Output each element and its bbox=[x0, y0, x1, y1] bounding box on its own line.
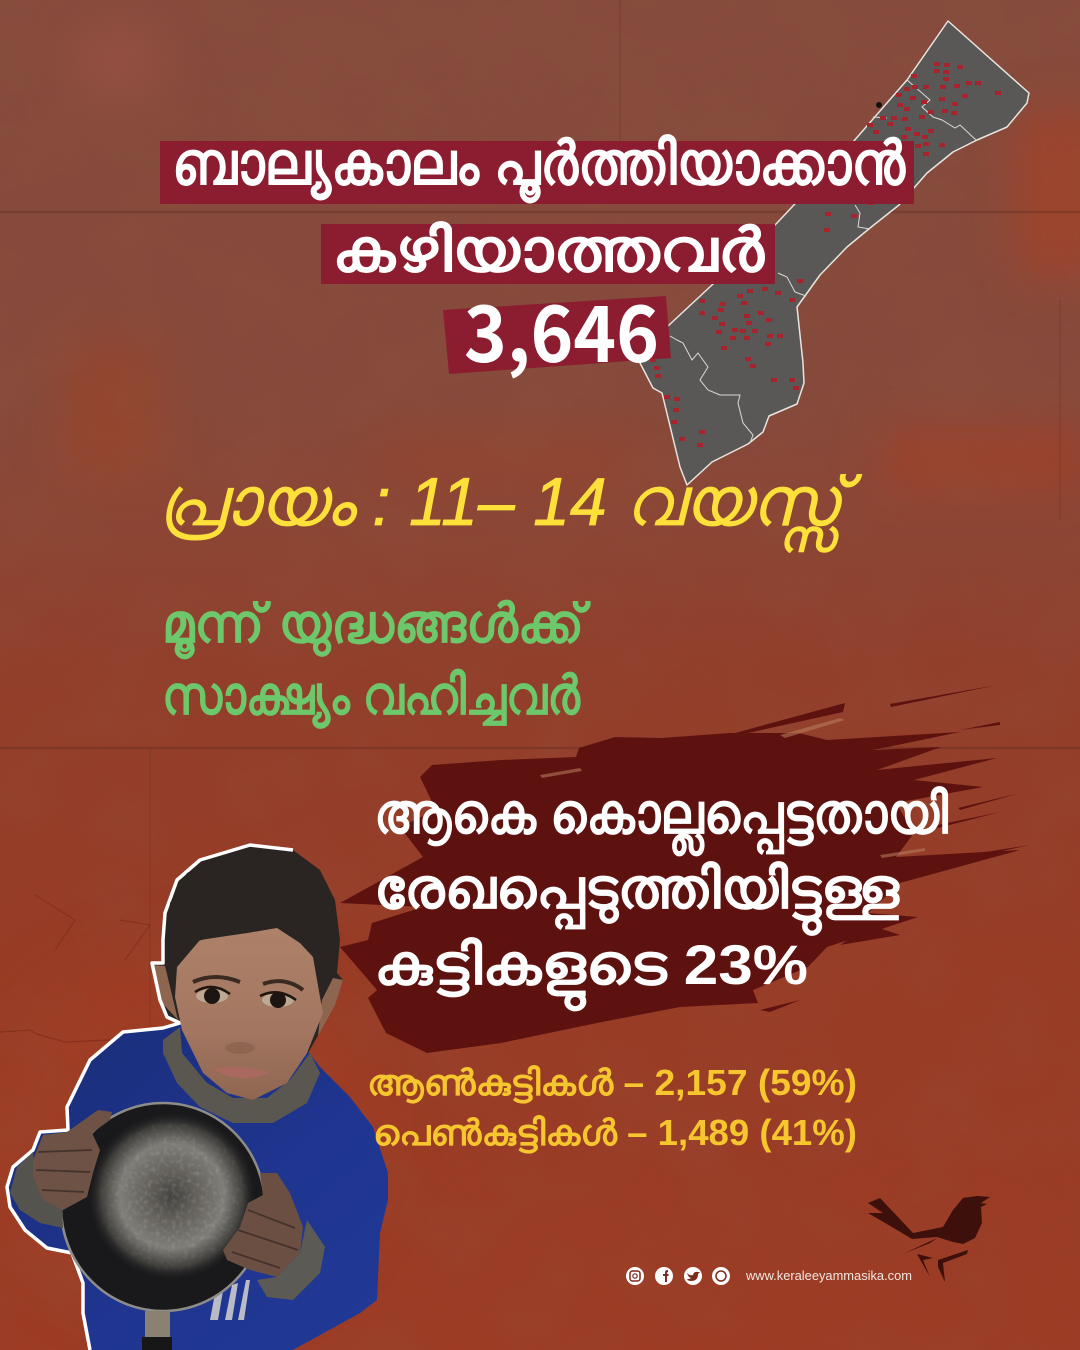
hair bbox=[167, 848, 338, 993]
right cuff bbox=[257, 1220, 325, 1300]
green subheading bbox=[162, 594, 591, 729]
stripes on sweater bbox=[210, 1280, 250, 1320]
statistic text: കുട്ടികളുടെ 23% bbox=[374, 933, 808, 1012]
social icons bbox=[626, 1267, 730, 1285]
collar bbox=[163, 1027, 320, 1123]
statistic text: രേഖപ്പെടുത്തിയിട്ടുള്ള bbox=[374, 857, 901, 936]
white cut-out outline bbox=[7, 845, 293, 1350]
pan bbox=[61, 1103, 265, 1311]
statistic text: ആകെ കൊല്ലപ്പെട്ടതായി bbox=[374, 782, 949, 857]
pan handle bbox=[145, 1311, 170, 1337]
ears bbox=[153, 965, 343, 1036]
right hand bbox=[223, 1173, 303, 1277]
gender breakdown: ആൺകുട്ടികൾ – 2,157 (59%) bbox=[367, 1062, 857, 1104]
sweater bbox=[7, 1023, 388, 1350]
left hand bbox=[33, 1110, 112, 1210]
brush stroke behind statistic bbox=[340, 685, 1030, 1053]
heading line 1: ബാല്യകാലം പൂർത്തിയാക്കാൻ bbox=[172, 130, 906, 204]
gender breakdown: പെൺകുട്ടികൾ – 1,489 (41%) bbox=[373, 1112, 857, 1154]
logo: bird bbox=[868, 1196, 990, 1282]
head backing bbox=[152, 845, 343, 1055]
statistic text bbox=[374, 782, 949, 1012]
facial features bbox=[193, 977, 303, 1078]
map: Gaza strip bbox=[640, 21, 1029, 485]
age line: പ്രായം : 11– 14 വയസ്സ് bbox=[158, 464, 862, 553]
face bbox=[175, 928, 323, 1100]
green subheading: സാക്ഷ്യം വഹിച്ചവർ bbox=[162, 666, 581, 729]
map markers: red dots bbox=[650, 62, 1001, 447]
heading line 2: കഴിയാത്തവർ bbox=[332, 217, 765, 284]
website url: www.keraleeyammasika.com bbox=[745, 1268, 912, 1283]
left cuff bbox=[10, 1152, 63, 1228]
gender breakdown bbox=[367, 1062, 857, 1154]
small map pin bbox=[876, 102, 882, 108]
big number 3,646: 3,646 bbox=[464, 273, 659, 385]
green subheading: മൂന്ന് യുദ്ധങ്ങൾക്ക് bbox=[162, 594, 591, 659]
photo: boy holding empty pan bbox=[7, 845, 388, 1350]
